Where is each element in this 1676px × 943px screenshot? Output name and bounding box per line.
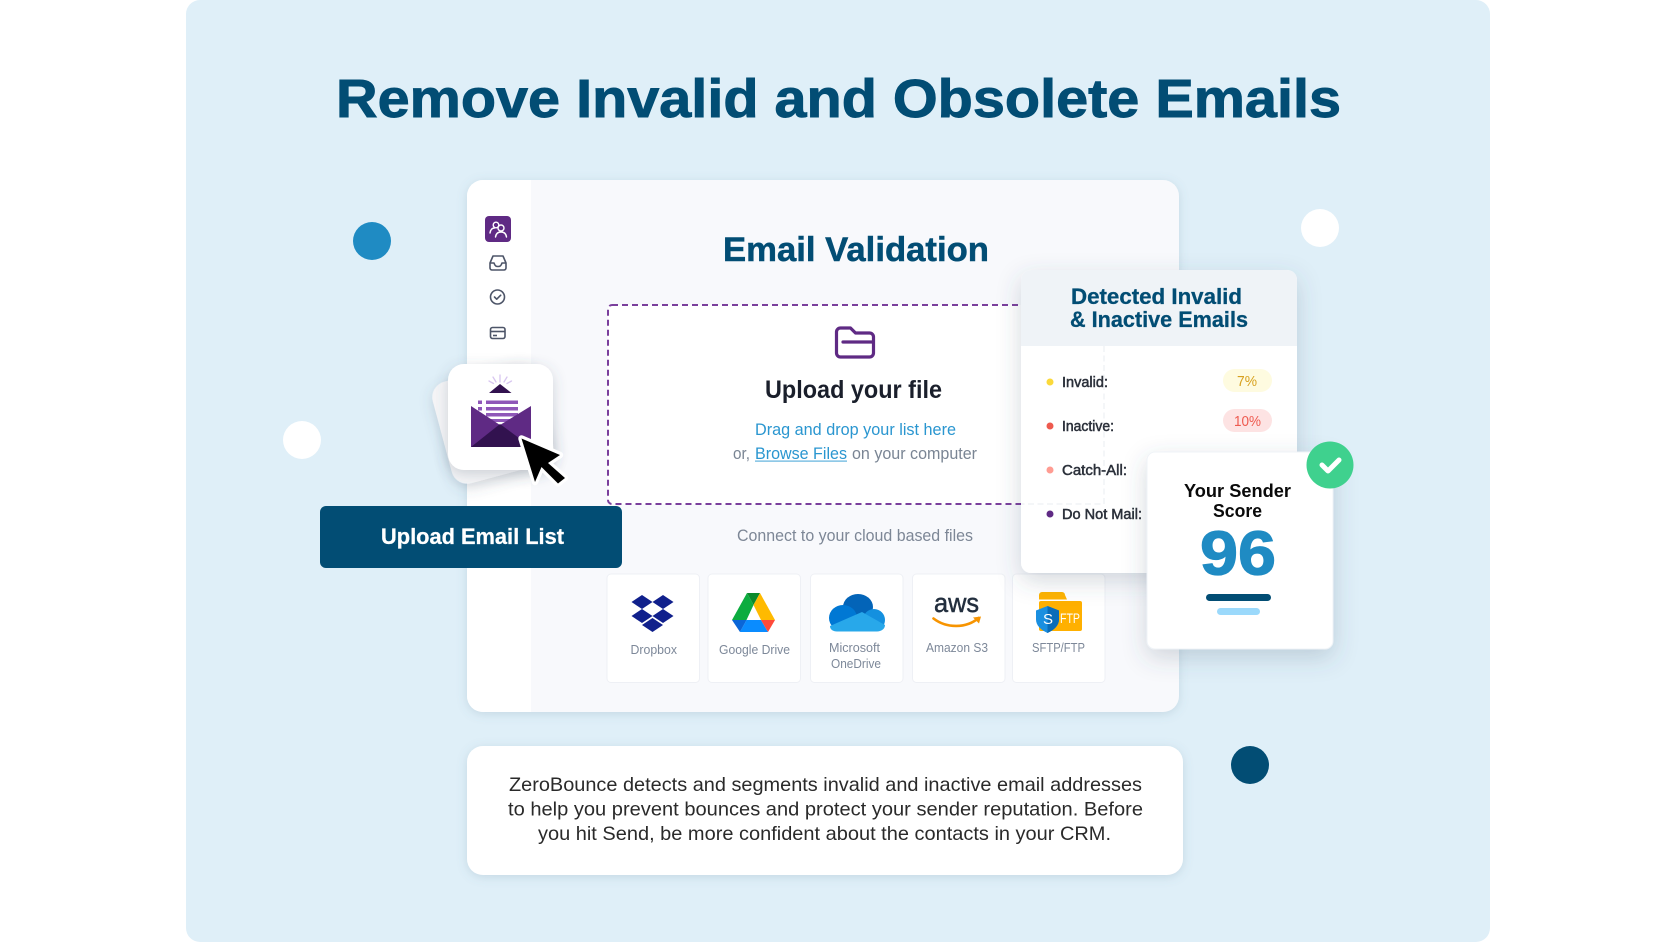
row: inactive: Inactive: [1062,419,1114,435]
title: Remove Invalid and Obsolete Emails [336,69,1341,129]
score card [1147,452,1333,649]
text: browse files line: or, [733,445,750,463]
panel: email validation app window [467,180,1179,712]
score bar light [1217,608,1260,615]
header text: Detected Invalid [1071,284,1242,309]
background panel [186,0,1490,942]
card header [1021,270,1297,346]
panel: your sender score [1147,442,1354,649]
envelope body [471,406,531,447]
tile: SFTP/FTP: S [1043,611,1053,628]
icon: green check [1306,442,1354,488]
front tile [448,364,553,470]
score heading: Score [1213,501,1262,521]
description text: ZeroBounce detects and segments invalid and inactive email addresses [509,774,1142,796]
description text [508,774,1143,845]
tile: Amazon S3 [912,574,1005,682]
decorative dot: white left [283,421,321,459]
tile: Amazon S3: Amazon S3 [926,640,988,655]
sidebar [467,180,531,712]
tile: Google Drive: Google Drive [719,642,790,657]
tile: Amazon S3: aws [934,588,979,618]
panel: detected invalid and inactive emails [1021,270,1297,573]
score heading: Your Sender [1184,481,1291,501]
icon: inbox [490,256,506,270]
app window background [467,180,1179,712]
icon: folder [836,328,874,357]
icon: verified badge [490,290,504,304]
faint dashed continuation of drop zone [1021,346,1104,504]
cursor [522,438,565,484]
tile: Dropbox [607,574,700,682]
text: drag and drop: Drag and drop your list here [755,421,956,439]
row: catch-all: Catch-All: [1062,463,1127,479]
icon: contacts tile [485,216,511,242]
header text line 2: & Inactive Emails [1070,307,1248,332]
row: inactive: 10% [1234,414,1261,430]
decorative dot: blue [353,222,391,260]
text: browse files line: on your computer [852,445,977,463]
description text: you hit Send, be more confident about the contacts in your CRM. [538,823,1111,845]
tile: Microsoft OneDrive [810,574,903,682]
score bar dark [1206,594,1271,601]
icon: envelope tile with cursor [429,359,565,487]
letter stripes [478,400,518,422]
row: invalid [1046,369,1272,392]
score value: 96 [1200,520,1276,588]
text: browse files line: Browse Files [755,445,847,463]
text: connect cloud: Connect to your cloud based files [737,527,973,545]
letter [474,393,527,427]
icon: credit card [490,328,505,338]
panel: description callout [467,746,1183,875]
decorative dot: white right [1301,209,1339,247]
tile: Dropbox: Dropbox [630,642,677,657]
card body [1021,270,1297,573]
heading: Email Validation: Email Validation [723,231,989,269]
row: invalid: 7% [1237,374,1257,390]
sparkle [489,375,512,384]
back tile [429,359,557,487]
button: Upload Email List [320,506,622,568]
button: Upload Email List: Upload Email List [381,524,565,549]
text: Upload your file: Upload your file [765,376,942,404]
text: browse files line [733,445,977,463]
tile: Google Drive [708,574,800,682]
row: do not mail: Do Not Mail: [1062,507,1142,523]
decorative dot: navy [1231,746,1269,784]
score heading [1184,481,1291,521]
description text: to help you prevent bounces and protect your sender reputation. Before [508,798,1143,820]
envelope flap top [489,384,512,393]
row: invalid: Invalid: [1062,375,1108,391]
tile: SFTP/FTP [1012,574,1105,682]
upload drop zone [608,305,1104,504]
tile: Microsoft OneDrive: OneDrive [831,656,881,671]
tile: SFTP/FTP: SFTP/FTP [1032,640,1085,655]
tile: Microsoft OneDrive: Microsoft [829,640,880,655]
tile: SFTP/FTP: FTP [1060,611,1080,626]
row: inactive [1046,409,1272,435]
envelope lower fold [471,424,531,447]
